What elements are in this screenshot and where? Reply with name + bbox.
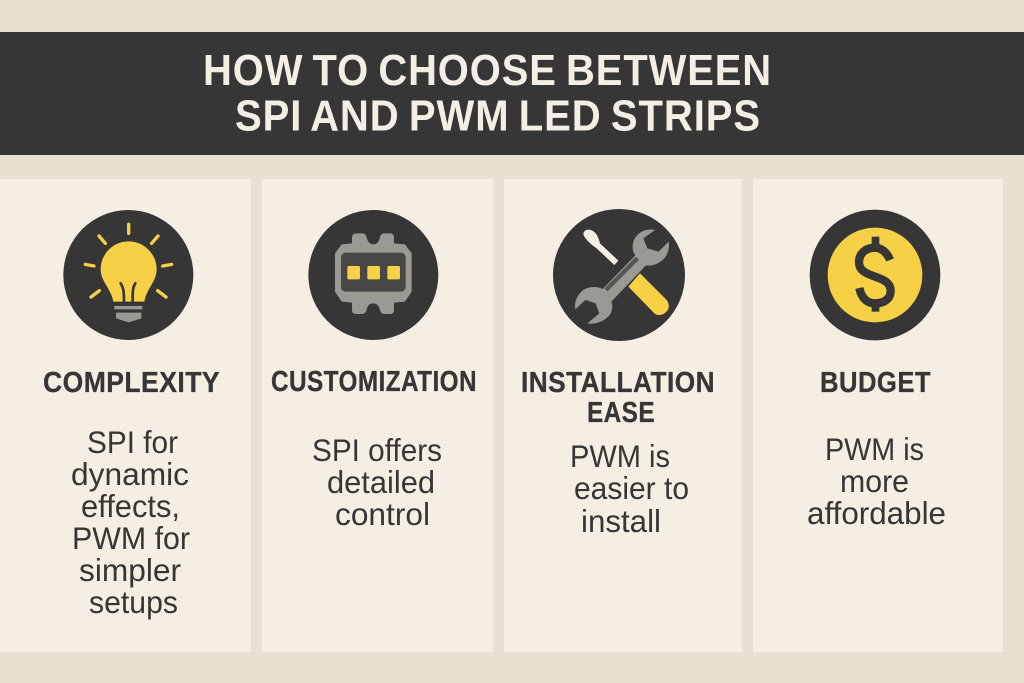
panel: installation ease bbox=[504, 179, 742, 652]
text: customization description bbox=[312, 432, 442, 532]
text: budget description: PWM is bbox=[825, 431, 924, 467]
heading: budget: BUDGET bbox=[820, 367, 931, 399]
icon: LED chip bbox=[308, 210, 438, 340]
text: complexity description: setups bbox=[89, 584, 178, 620]
heading: complexity: COMPLEXITY bbox=[43, 367, 220, 399]
title: SPI AND PWM LED STRIPS bbox=[235, 92, 761, 140]
text: complexity description: PWM for bbox=[72, 520, 190, 556]
text: installation description bbox=[570, 438, 689, 539]
text: customization description: control bbox=[335, 496, 430, 532]
icon: light bulb bbox=[63, 210, 193, 340]
text: customization description: detailed bbox=[327, 464, 435, 500]
text: complexity description bbox=[71, 424, 190, 620]
text: budget description: affordable bbox=[807, 495, 946, 531]
title banner bbox=[0, 32, 1024, 155]
text: complexity description: effects, bbox=[81, 488, 180, 524]
heading: installation ease: EASE bbox=[587, 397, 655, 429]
panel: complexity bbox=[0, 179, 251, 652]
panel: customization bbox=[262, 179, 493, 652]
heading: customization: CUSTOMIZATION bbox=[271, 366, 477, 398]
text: installation description: PWM is bbox=[570, 438, 670, 474]
text: complexity description: SPI for bbox=[87, 424, 178, 460]
title: HOW TO CHOOSE BETWEEN bbox=[203, 46, 772, 95]
text: budget description bbox=[807, 431, 946, 531]
text: complexity description: simpler bbox=[79, 552, 181, 588]
text: complexity description: dynamic bbox=[71, 456, 189, 492]
heading: installation ease: INSTALLATION bbox=[521, 367, 715, 399]
text: customization description: SPI offers bbox=[312, 432, 442, 468]
text: budget description: more bbox=[840, 463, 909, 499]
title bbox=[203, 46, 772, 140]
text: installation description: easier to bbox=[574, 470, 689, 506]
text: installation description: install bbox=[581, 503, 661, 539]
icon: wrench and screwdriver bbox=[553, 209, 685, 341]
panel: budget bbox=[753, 179, 1003, 652]
heading: installation ease bbox=[521, 367, 715, 429]
icon: dollar coin bbox=[810, 210, 940, 340]
